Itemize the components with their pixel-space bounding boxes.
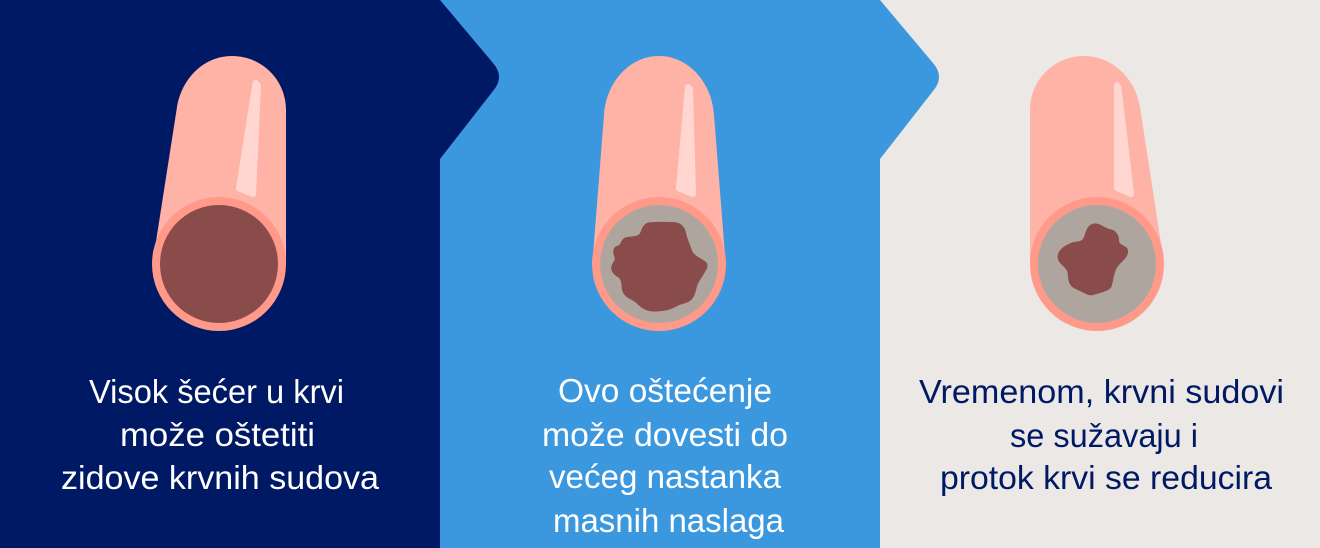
panel: light grey step 3 background	[880, 0, 1320, 548]
vessel opening rim	[152, 197, 286, 331]
text: step 3 caption: Vremenom, krvni sudovi	[919, 373, 1284, 410]
text: step 2 caption: Ovo oštećenje	[558, 372, 772, 409]
text: step 1 caption: može oštetiti	[120, 416, 315, 453]
vessel lumen	[160, 205, 278, 323]
text: step 3 caption	[919, 373, 1284, 496]
vessel body	[593, 56, 725, 270]
vessel opening rim	[592, 197, 726, 331]
vessel opening rim	[1030, 197, 1164, 331]
panel: blue step 2 background with arrow	[440, 0, 939, 548]
text: step 3 caption: se sužavaju i	[1010, 417, 1198, 454]
vessel body	[152, 56, 286, 264]
text: step 2 caption: većeg nastanka	[549, 458, 782, 495]
vessel highlight	[239, 83, 258, 194]
vessel highlight	[1117, 85, 1131, 194]
icon: healthy blood vessel	[152, 56, 286, 331]
text: step 1 caption	[61, 373, 380, 496]
icon: narrowed vessel	[1030, 56, 1164, 331]
text: step 2 caption: može dovesti do	[542, 416, 788, 453]
text: step 1 caption: Visok šećer u krvi	[89, 373, 344, 410]
narrowed blood channel	[611, 222, 707, 311]
fatty deposit layer	[600, 205, 718, 323]
vessel body	[1030, 56, 1162, 264]
icon: vessel with fatty deposits	[592, 56, 726, 331]
vessel highlight	[679, 87, 693, 194]
fatty deposit layer	[1038, 205, 1156, 323]
text: step 2 caption: masnih naslaga	[553, 502, 785, 539]
severely narrowed blood channel	[1058, 223, 1128, 295]
text: step 2 caption	[542, 372, 788, 539]
text: step 3 caption: protok krvi se reducira	[940, 459, 1273, 496]
panel: navy step 1 background with arrow	[0, 0, 499, 548]
text: step 1 caption: zidove krvnih sudova	[61, 459, 380, 496]
